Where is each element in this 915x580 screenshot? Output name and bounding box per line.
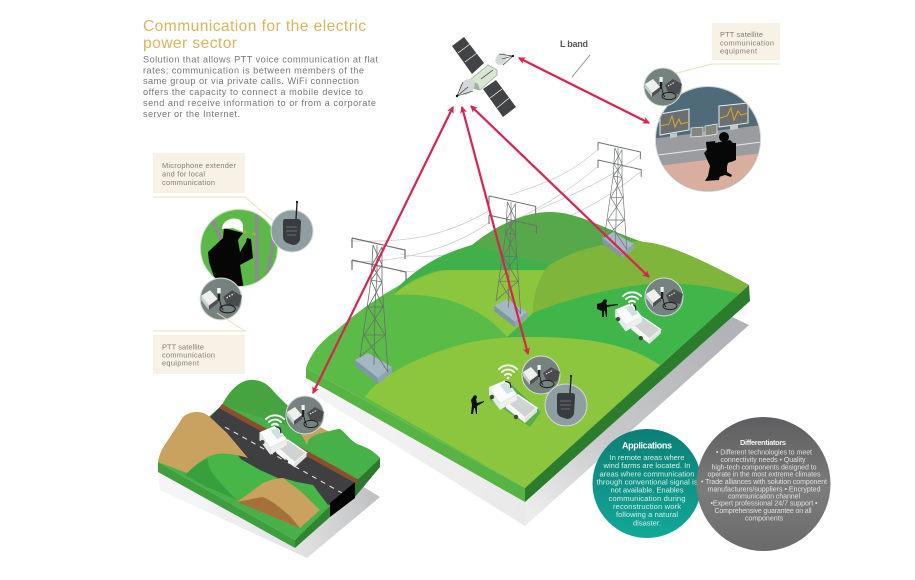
applications circle — [592, 429, 702, 538]
road equipment — [286, 396, 324, 434]
pylon right — [598, 142, 641, 258]
intro text: server or the Internet. — [143, 109, 240, 119]
road truck — [259, 425, 307, 468]
road edge — [219, 404, 358, 484]
control room — [655, 86, 761, 192]
pylon middle — [489, 196, 537, 327]
back hill — [222, 380, 300, 428]
power lines — [350, 150, 640, 272]
technician — [471, 395, 484, 414]
equipment — [522, 356, 560, 394]
signal arrows — [313, 58, 649, 393]
applications circle: communication during — [608, 494, 686, 503]
title: power sector — [143, 35, 237, 52]
intro text: send and receive information to or from a corporate — [143, 98, 376, 108]
applications circle: areas where communication — [600, 470, 694, 478]
differentiators circle: operate in the most extreme climates — [708, 472, 821, 478]
worker equipment — [200, 278, 242, 320]
control room equipment — [644, 68, 682, 106]
road dashes — [225, 427, 342, 493]
road wifi — [266, 415, 284, 429]
differentiators circle: Comprehensive guarantee on all — [714, 508, 812, 515]
monitor left — [660, 109, 689, 138]
worker radio — [271, 201, 313, 252]
dish lower — [456, 76, 478, 98]
differentiators circle: • Trade alliances with solution component — [701, 479, 827, 486]
differentiators circle: Differentiators — [740, 438, 786, 447]
differentiators circle: manufacturers/suppliers • Encrypted — [708, 486, 821, 494]
callout: PTT equipment left: PTT satellite — [162, 342, 204, 352]
callout: PTT equipment top right: communication — [720, 38, 774, 48]
truck shadow — [489, 385, 541, 427]
intro text: Solution that allows PTT voice communication at flat — [143, 54, 378, 64]
applications circle: Applications — [622, 440, 672, 450]
applications circle: In remote areas where — [610, 453, 684, 462]
right hill — [307, 429, 380, 479]
differentiators circle: components — [745, 516, 784, 522]
callout: PTT equipment left: equipment — [162, 358, 199, 368]
callout: PTT equipment top right: equipment — [720, 46, 757, 56]
pylon left — [352, 238, 406, 384]
monitor right — [719, 103, 748, 130]
green wedge — [283, 478, 328, 510]
differentiators circle: connectivity needs • Quality — [720, 457, 806, 464]
differentiators circle: high-tech components designed to — [712, 464, 817, 472]
differentiators circle: communication channel — [728, 494, 800, 500]
wifi — [623, 292, 641, 306]
intro text: rates; communication is between members of the — [143, 66, 364, 76]
dish upper — [493, 51, 514, 67]
callout: microphone extender: Microphone extender — [162, 161, 237, 170]
front truck group — [471, 356, 587, 427]
intro text: offers the capacity to connect a mobile device to — [143, 87, 363, 97]
excavated earth — [237, 497, 300, 528]
main landscape — [300, 205, 755, 502]
front earth hill — [237, 478, 320, 528]
L band pointer — [572, 55, 590, 77]
callout: PTT equipment left: communication — [162, 350, 215, 360]
operator — [704, 132, 736, 181]
callout: PTT equipment top right — [665, 23, 780, 79]
solar panel lower — [483, 80, 516, 117]
land shadow — [306, 317, 749, 526]
technician — [597, 299, 618, 317]
road scene — [158, 380, 380, 548]
applications circle: reconstruction work — [613, 502, 681, 511]
small monitors — [691, 124, 717, 137]
wifi — [499, 365, 517, 379]
callout: PTT equipment left — [153, 313, 245, 374]
intro text — [143, 54, 378, 119]
front dark hill — [185, 458, 237, 500]
road surface — [210, 405, 357, 505]
handheld radio — [545, 375, 587, 426]
body — [470, 65, 497, 90]
callout: microphone extender: and for local — [162, 170, 205, 178]
intro text: same group or via private calls. WiFi connection — [143, 76, 359, 86]
desk — [656, 126, 760, 166]
floor — [663, 154, 758, 191]
truck — [489, 380, 537, 423]
left earth hill — [158, 412, 248, 473]
applications circle: not available. Enables — [610, 486, 684, 494]
equipment — [645, 278, 683, 316]
right truck group — [597, 278, 683, 344]
front green hill — [185, 454, 278, 500]
solar panel upper — [452, 37, 484, 74]
applications circle: through conventional signal is — [596, 478, 698, 486]
differentiators circle: •Expert professional 24/7 support • — [710, 500, 818, 508]
road cut end — [330, 482, 355, 517]
worker portrait — [200, 209, 278, 287]
L band label: L band — [560, 39, 588, 49]
satellite — [452, 37, 516, 117]
callout: PTT equipment top right: PTT satellite — [720, 30, 763, 39]
truck — [615, 303, 661, 344]
road scene shadow — [158, 472, 380, 558]
tan patch behind truck — [290, 413, 330, 445]
title: Communication for the electric — [143, 18, 366, 35]
callout: microphone extender — [153, 153, 273, 221]
differentiators circle: • Different technologies to meet — [716, 450, 812, 456]
callout: microphone extender: communication — [162, 178, 215, 187]
applications circle: following a natural — [616, 510, 678, 519]
differentiators circle — [696, 417, 830, 551]
title — [143, 18, 366, 52]
applications circle: wind farms are located. In — [602, 461, 690, 470]
applications circle: disaster. — [633, 518, 661, 528]
